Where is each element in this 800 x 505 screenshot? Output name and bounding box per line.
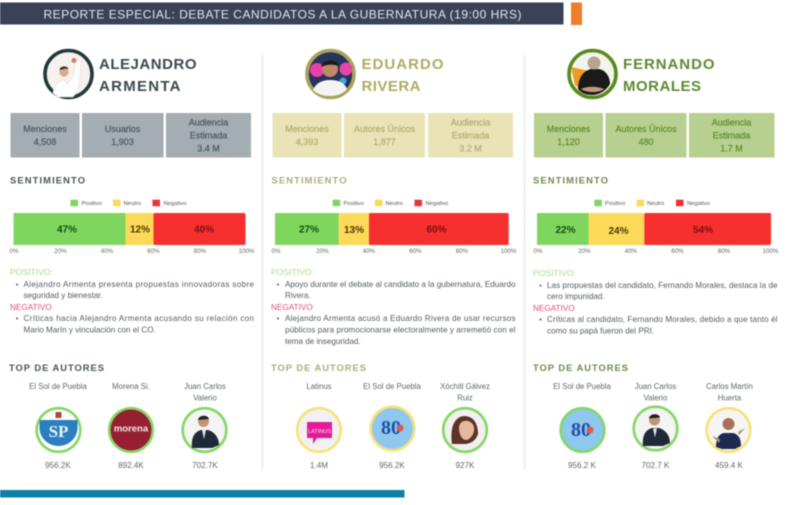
sentiment commentary: cero impunidad. [547,292,605,301]
top author: Latinus [297,382,341,470]
sentiment commentary [533,268,778,336]
top author: El Sol de Puebla: El Sol de Puebla [553,382,611,391]
candidate name: ARMENTA [99,78,181,95]
top author: Morena Si [109,382,153,470]
panel: Eduardo Rivera [271,50,517,470]
stat boxes: 1.7 M [720,144,743,154]
sentiment commentary: NEGATIVO [10,303,52,312]
top author: El Sol de Puebla: SP [49,422,68,441]
top author: Morena Si: 892.4K [118,461,144,470]
panel: Fernando Morales [533,50,779,470]
top author: El Sol de Puebla: 956.2 K [568,461,597,470]
sentiment commentary: Alejandro Armenta presenta propuestas innovadoras sobre [24,280,254,289]
stacked bar chart: 80% [194,248,207,255]
stat boxes [534,113,774,158]
stacked bar chart: 20% [578,248,591,255]
top author: Carlos Martin Huerta: Huerta [718,394,742,402]
stat boxes [272,113,513,158]
legend: Positivo [344,201,364,207]
top author: El Sol de Puebla [553,382,611,470]
heading: sentimiento: SENTIMIENTO [533,174,608,186]
sentiment commentary: NEGATIVO [533,304,575,313]
top author: Latinus: LATINUS [308,429,331,435]
sentiment commentary: Apoyo durante el debate al candidato a la gubernatura, Eduardo [285,280,516,289]
sentiment commentary: NEGATIVO [271,303,313,312]
top author: Carlos Martin Huerta: Carlos Martín [706,382,753,391]
candidate portrait: Morales [569,50,616,98]
stat boxes: Menciones [547,124,591,134]
sentiment commentary: Rivera. [285,291,311,300]
candidate portrait: Rivera [307,50,354,98]
top author: El Sol de Puebla [363,382,421,470]
stacked bar chart: 40% [363,248,376,255]
top author: El Sol de Puebla: 956.2K [45,461,71,470]
top author: Carlos Martin Huerta: 459.4 K [715,461,744,470]
stacked bar chart [272,213,517,255]
top author: Xochitl Galvez Ruiz [440,382,490,470]
stacked bar chart: 40% [194,224,214,236]
stacked bar chart: 40% [625,248,638,255]
stacked bar chart: 80% [718,248,731,255]
sentiment commentary [271,267,516,346]
stacked bar chart: 27% [299,224,319,236]
stacked bar chart: 40% [101,248,114,255]
legend: Neutro [124,201,141,207]
panel: Alejandro Armenta [9,50,255,470]
stacked bar chart: 60% [409,248,422,255]
sentiment commentary: POSITIVO: [271,267,314,277]
legend: Neutro [647,201,664,207]
legend: Negativo [687,201,710,207]
stacked bar chart: 0% [534,248,543,255]
stacked bar chart: 100% [239,248,255,255]
stacked bar chart: 24% [608,226,629,237]
top author: El Sol de Puebla: 80 [381,417,401,439]
candidate name [362,56,444,95]
top author: Juan Carlos Valerio [183,382,226,470]
heading: top de autores: TOP DE AUTORES [271,362,366,373]
candidate name: MORALES [623,78,701,95]
top author: Xochitl Galvez Ruiz: 927K [456,461,475,470]
stacked bar chart: 60% [426,224,447,236]
legend [333,200,448,207]
stacked bar chart: 12% [130,224,150,236]
top author: Juan Carlos Valerio: 702.7K [192,461,218,470]
stacked bar chart: 22% [555,225,576,236]
top author: Xochitl Galvez Ruiz: Xóchitl Gálvez [440,382,490,391]
sentiment commentary: Las propuestas del candidato, Fernando Morales, destaca la de [547,281,778,290]
stat boxes: Estimada [452,130,489,140]
stat boxes: 1,120 [557,137,580,147]
sentiment commentary [10,267,254,334]
stacked bar chart: 0% [10,248,19,255]
top author: Juan Carlos Valerio: Valerio [193,394,218,402]
heading: sentimiento: SENTIMIENTO [272,174,346,186]
legend: Positivo [605,201,625,207]
top author: Morena Si: Morena Si. [112,382,150,391]
stat boxes: Autores Únicos [615,124,677,134]
top author: Carlos Martin Huerta [706,382,753,470]
stacked bar chart: 20% [316,248,329,255]
legend: Negativo [426,201,448,207]
stacked bar chart: 60% [147,248,160,255]
stat boxes [10,113,251,158]
stacked bar chart: 100% [501,248,517,255]
legend [594,200,710,207]
stat boxes: 1,903 [111,137,134,147]
header banner [0,2,564,24]
stat boxes: Audiencia [712,118,751,128]
candidate name: EDUARDO [362,56,444,73]
sentiment commentary: Críticas hacia Alejandro Armenta acusando su relación con [24,314,254,323]
stat boxes: Menciones [285,124,329,134]
sentiment commentary: Mario Marín y vinculación con el CO. [24,326,156,334]
top author: Juan Carlos Valerio: Juan Carlos [184,382,226,391]
stacked bar chart: 54% [693,225,713,236]
legend: Negativo [164,201,186,207]
candidate name [623,56,715,95]
heading: top de autores: TOP DE AUTORES [533,362,628,373]
top author: El Sol de Puebla: 956.2K [379,461,405,470]
stat boxes: Autores Únicos [354,124,416,134]
stacked bar chart: 80% [456,248,469,255]
top author: El Sol de Puebla [29,382,87,470]
candidate portrait: Armenta [45,50,92,98]
stacked bar chart: 13% [344,225,364,236]
top author: Latinus: Latinus [306,382,332,391]
top author: El Sol de Puebla: 80 [571,419,591,441]
sentiment commentary: Alejandro Armenta acusó a Eduardo Rivera de usar recursos [285,314,516,323]
stacked bar chart: 60% [671,248,684,255]
top author: Juan Carlos Valerio: 702.7 K [642,461,670,470]
sentiment commentary: públicos para promocionarse electoralmente y arremetió con el [285,326,516,334]
sentiment commentary: POSITIVO: [533,268,576,278]
stat boxes: Audiencia [189,118,228,128]
stat boxes: 480 [638,137,654,147]
sentiment commentary: tema de inseguridad. [285,337,361,346]
top author: Juan Carlos Valerio: Valerio [644,394,668,402]
stat boxes: 4,508 [34,137,56,147]
top author: Juan Carlos Valerio [634,382,677,470]
stat boxes: 3.2 M [459,144,482,154]
stacked bar chart [10,213,255,255]
sentiment commentary: como su papá fueron del PRI. [547,326,654,336]
heading: sentimiento: SENTIMIENTO [10,174,85,186]
title: REPORTE ESPECIAL: DEBATE CANDIDATOS A LA GUBERNATURA (19:00 HRS) [44,8,522,22]
top author: Juan Carlos Valerio: Juan Carlos [635,382,676,391]
stacked bar chart: 100% [763,248,779,255]
stat boxes: Usuarios [105,124,141,134]
stat boxes: Estimada [713,130,750,140]
stat boxes: Audiencia [451,118,490,128]
top author: El Sol de Puebla: El Sol de Puebla [363,382,421,391]
top author: Latinus: 1.4M [310,461,328,470]
sentiment commentary: Críticas al candidato, Fernando Morales, debido a que tanto él [547,315,778,324]
stacked bar chart: 47% [57,224,77,236]
stacked bar chart [534,213,779,255]
orange accent block [571,2,582,25]
legend: Neutro [386,201,403,207]
sentiment commentary: POSITIVO: [10,267,53,277]
candidate name [99,56,197,95]
top author: Xochitl Galvez Ruiz: Ruiz [457,394,473,402]
footer bar [0,490,404,498]
candidate name: FERNANDO [623,56,715,73]
heading: top de autores: TOP DE AUTORES [9,362,104,373]
stat boxes: 1,877 [373,137,396,147]
sentiment commentary: seguridad y bienestar. [24,291,103,300]
stat boxes: Estimada [190,130,227,140]
candidate name: ALEJANDRO [99,56,197,73]
stat boxes: 4,393 [296,137,318,147]
candidate name: RIVERA [362,78,421,95]
stacked bar chart: 20% [54,248,67,255]
top author: Morena Si: morena [114,424,149,434]
legend: Positivo [82,201,102,207]
top author: El Sol de Puebla: El Sol de Puebla [29,382,87,391]
stat boxes: Menciones [23,124,67,134]
legend [70,200,186,207]
stat boxes: 3.4 M [197,144,220,154]
stacked bar chart: 0% [272,248,281,255]
